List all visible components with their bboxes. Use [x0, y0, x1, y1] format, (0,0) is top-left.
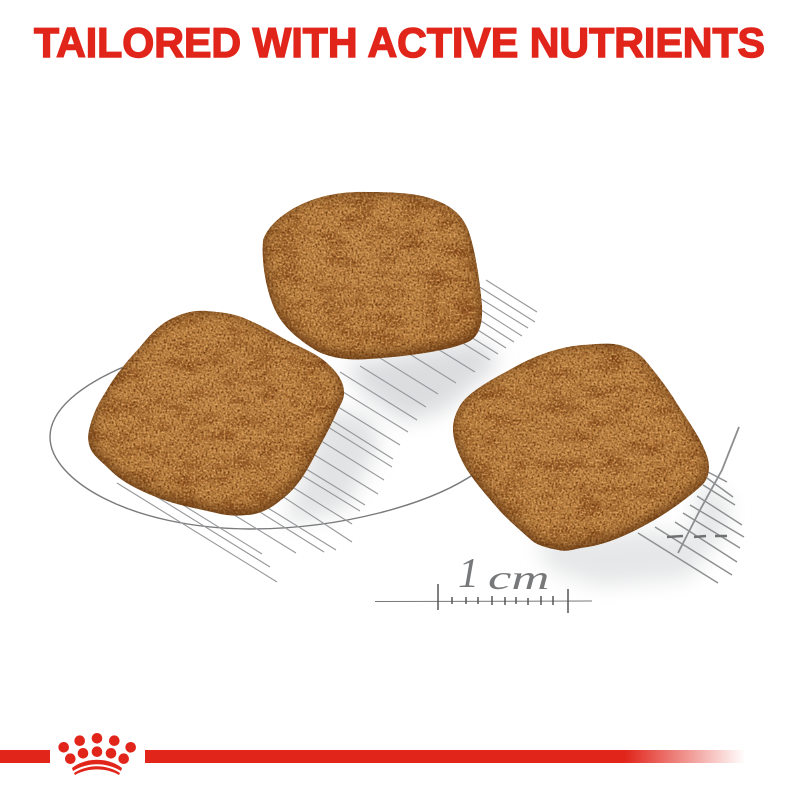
scale: 1 cm ruler [375, 551, 592, 613]
icon: crown logo [58, 733, 136, 775]
kibble: top [263, 192, 482, 360]
plate sketch outline [50, 365, 477, 529]
handwritten label cm: cm [488, 558, 549, 597]
soft shadows under kibbles [285, 340, 730, 586]
handwritten label 1: 1 [458, 551, 479, 597]
kibble: left [88, 311, 344, 516]
footer bar left [0, 750, 50, 763]
sketch hatching right of third kibble [638, 427, 744, 583]
kibble: right [453, 344, 709, 551]
sketch hatching under kibbles [117, 280, 537, 582]
footer bar right fading [145, 750, 745, 763]
title: TAILORED WITH ACTIVE NUTRIENTS [34, 19, 765, 66]
